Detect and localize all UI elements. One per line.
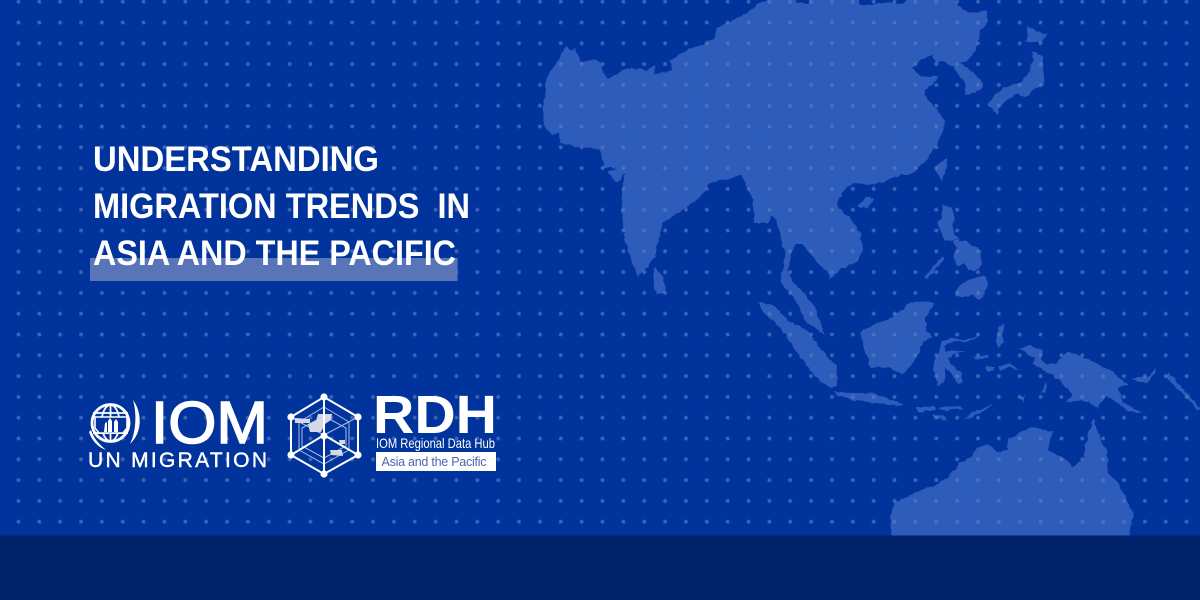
RDH subtitle: IOM Regional Data Hub xyxy=(376,435,495,451)
hexagon inner web xyxy=(290,407,358,464)
RDH wordmark: RDH xyxy=(373,385,497,445)
title: UNDERSTANDING xyxy=(93,140,379,179)
title highlight xyxy=(90,258,458,281)
footer band xyxy=(0,536,1200,600)
island: Hainan xyxy=(858,197,874,208)
RDH hexagon logo xyxy=(287,393,362,478)
logotype: IOM: IOM xyxy=(151,390,268,456)
map of Asia and the Pacific xyxy=(543,0,1200,545)
island: Sumatra xyxy=(758,302,837,388)
title: ASIA AND THE PACIFIC xyxy=(93,234,456,273)
IOM logo xyxy=(88,390,268,472)
landmass: mainland Asia xyxy=(543,0,987,334)
islands: Japan xyxy=(988,25,1048,115)
islands: Java and Lesser Sunda xyxy=(835,392,1026,420)
island: Sulawesi xyxy=(933,332,980,385)
islands: Philippines xyxy=(924,205,988,300)
island: Borneo xyxy=(860,302,935,375)
RDH region tag xyxy=(376,452,496,471)
title: MIGRATION TRENDS IN xyxy=(93,187,470,226)
islands: Melanesia xyxy=(1132,368,1200,410)
RDH region tag: Asia and the Pacific xyxy=(382,455,486,469)
islands: Maluku xyxy=(973,324,1047,393)
logotype: UN MIGRATION: UN MIGRATION xyxy=(88,449,267,472)
title xyxy=(93,140,470,273)
icon: IOM emblem xyxy=(89,400,140,450)
hexagon frame xyxy=(291,397,358,474)
hexagon mini map xyxy=(295,414,345,456)
landmass: Australia xyxy=(890,418,1133,545)
island: Sri Lanka xyxy=(653,267,666,295)
hexagon nodes xyxy=(287,393,362,478)
island: New Guinea xyxy=(1020,345,1143,414)
island: Taiwan xyxy=(935,158,947,182)
